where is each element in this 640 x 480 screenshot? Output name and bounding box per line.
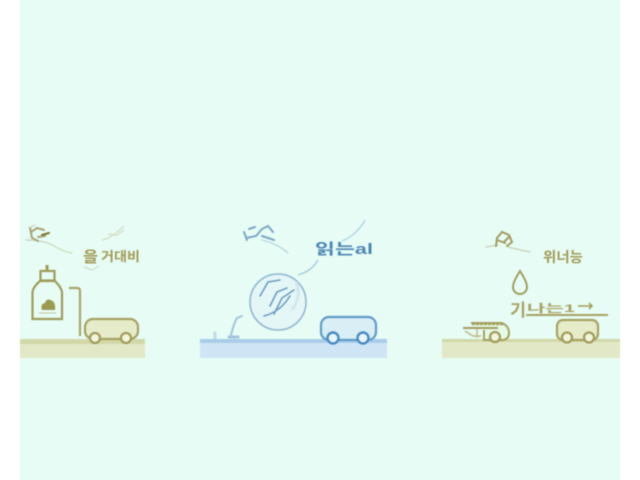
ground — [442, 339, 620, 358]
decorative branch — [244, 226, 288, 253]
icon: flame drop — [513, 271, 527, 294]
heading text: 을 — [83, 249, 98, 266]
vehicle: cart — [557, 320, 598, 342]
panel: centre blue scene — [200, 220, 387, 358]
decorative sprig — [84, 226, 124, 270]
heading text: 거대비 — [101, 249, 140, 264]
icon: bottle — [32, 265, 62, 319]
ground — [200, 339, 387, 358]
pipe text with arrow: 나는1 — [527, 301, 575, 315]
vehicle: cart — [321, 317, 376, 344]
vehicle: cart — [85, 319, 138, 343]
panel: left olive scene — [20, 225, 145, 358]
decorative sprig — [342, 220, 365, 241]
vehicle: tanker — [463, 323, 509, 342]
ground — [20, 339, 145, 358]
heading text: 읽는al — [315, 241, 373, 258]
pipe text with arrow — [510, 301, 608, 320]
heading text — [83, 249, 140, 266]
decorative branch — [486, 232, 530, 252]
connector curve — [298, 260, 318, 275]
icon: small pump — [215, 316, 242, 338]
bottle label — [39, 299, 56, 313]
panel: right olive scene — [442, 232, 620, 358]
pipe text with arrow: 기 — [510, 301, 526, 320]
icon: magnifier circle — [250, 274, 306, 330]
heading text: 위너능 — [543, 249, 583, 265]
decorative branch — [26, 225, 72, 253]
hose pipe — [69, 288, 80, 336]
